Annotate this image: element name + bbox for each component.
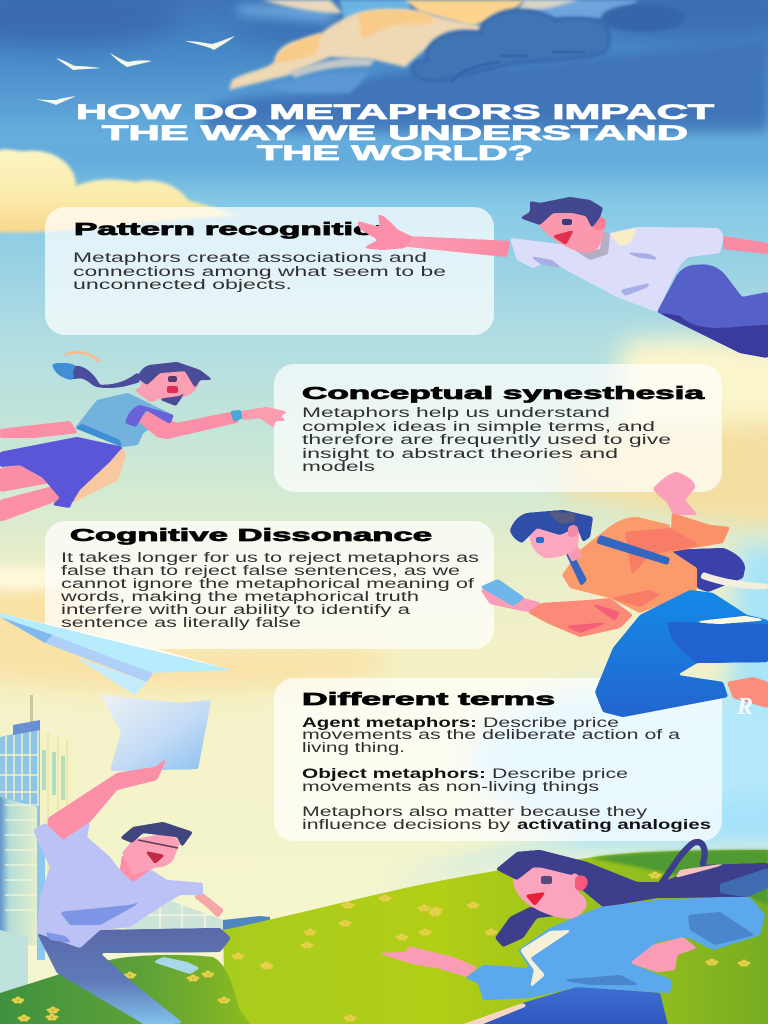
- raised arm: [47, 758, 167, 840]
- backpack strap: [700, 572, 768, 589]
- t-shirt: [510, 227, 723, 312]
- hair: [510, 510, 593, 543]
- shirt shadow folds: [530, 252, 660, 296]
- right arm: [194, 891, 224, 918]
- ponytail: [52, 365, 140, 388]
- large blue cloud mass: [205, 40, 768, 135]
- shoulder strap: [566, 535, 670, 586]
- dark blob top right: [601, 4, 685, 32]
- left yellow cloud: [0, 149, 240, 233]
- reaching arm: [137, 410, 240, 439]
- middle block: [0, 797, 37, 945]
- character: man with glasses and paper: [33, 695, 231, 1024]
- character: flying boy top right: [357, 197, 768, 358]
- forearm: [527, 598, 633, 637]
- plane bright wing: [0, 613, 232, 673]
- panel: different terms: [274, 678, 722, 841]
- bird 2: [110, 53, 152, 67]
- skirt lining: [72, 447, 126, 503]
- title: THE WORLD?: [257, 142, 533, 165]
- paper sheet: [100, 695, 211, 771]
- hand: [241, 407, 288, 428]
- shirt cream highlight: [520, 930, 572, 988]
- shirt: [465, 897, 765, 1000]
- front leg: [0, 485, 65, 522]
- far arm: [723, 236, 768, 254]
- plane top edge: [0, 613, 232, 670]
- body: cognitive dissonance: false than to reject false sentences, as we: [61, 563, 460, 578]
- pants shadow: [668, 622, 768, 663]
- yellow sunlit cloud: [405, 0, 525, 26]
- cream cumulus: [229, 9, 490, 90]
- character: flying girl left: [0, 352, 288, 522]
- hair: [520, 197, 603, 228]
- plane fold: [45, 635, 153, 682]
- hair: [120, 822, 193, 847]
- illustration: paper plane: [0, 613, 232, 695]
- face: [537, 212, 603, 253]
- ponytail ribbon: [65, 352, 100, 362]
- block behind man: [125, 897, 223, 930]
- object metaphors text: Describe price: [492, 766, 628, 781]
- eye: [541, 876, 552, 884]
- pants highlight: [690, 616, 768, 624]
- blue block gap: [37, 830, 45, 960]
- mouth: [552, 230, 574, 245]
- grey cloud shade: [289, 58, 375, 78]
- plane lower wing: [75, 657, 147, 695]
- left dark green hill: [0, 955, 250, 1024]
- middle block lines: [5, 805, 37, 910]
- face: [513, 868, 587, 918]
- bird 1: [185, 36, 235, 50]
- body: conceptual synesthesia: complex ideas in simple terms, and: [302, 419, 655, 434]
- body: conceptual synesthesia: insight to abstract theories and: [302, 446, 618, 461]
- fist: [653, 472, 698, 515]
- long hair: [495, 850, 768, 907]
- ear: [594, 217, 606, 230]
- city buildings: [0, 695, 270, 1000]
- pointing hand and arm: [377, 946, 477, 977]
- hair highlight: [675, 862, 735, 878]
- heading: conceptual synesthesia: Conceptual synesthesia: [302, 383, 705, 403]
- panel: cognitive dissonance: [45, 521, 494, 649]
- mouth: [167, 386, 178, 393]
- body: conceptual synesthesia: [302, 405, 671, 474]
- bright blue sky gap: [340, 0, 410, 25]
- neck: [120, 855, 150, 882]
- closing statement text: influence decisions by: [302, 817, 510, 832]
- sleeve: [125, 405, 174, 427]
- raised sleeve: [670, 513, 730, 552]
- shirt shadow: [45, 900, 145, 943]
- lower right blue sky: [380, 545, 768, 885]
- agent metaphors text: Agent metaphors:: [302, 715, 477, 730]
- eye: [562, 219, 572, 225]
- panel: conceptual synesthesia: [274, 364, 722, 492]
- hand: [480, 589, 542, 612]
- birds: [35, 36, 235, 105]
- body: cognitive dissonance: [59, 550, 479, 630]
- bird 4: [35, 96, 76, 105]
- agent metaphors text: living thing.: [302, 740, 405, 755]
- reaching hand: [357, 214, 413, 250]
- eye: [536, 537, 544, 543]
- character: woman with long hair: [377, 842, 768, 1024]
- title: [76, 101, 714, 165]
- torso: [562, 517, 697, 613]
- body: cognitive dissonance: sentence as literally false: [61, 615, 301, 630]
- pants: [595, 590, 768, 717]
- body: pattern recognition: [73, 250, 446, 292]
- bracelet: [230, 410, 243, 422]
- left hair lock: [495, 907, 563, 947]
- body: pattern recognition: Metaphors create associations and: [73, 250, 427, 265]
- ponytail tip: [52, 363, 76, 380]
- pants: [37, 928, 231, 1024]
- body: cognitive dissonance: interfere with our ability to identify a: [61, 602, 411, 617]
- body: pattern recognition: unconnected objects.: [73, 277, 292, 292]
- main green hill: [223, 850, 768, 1024]
- pale blue sky top right: [520, 0, 640, 18]
- tower right window lines: [48, 733, 67, 900]
- skirt: [477, 987, 668, 1024]
- agent metaphors text: [302, 715, 681, 755]
- tower window lines: [0, 730, 38, 806]
- window lines behind man: [130, 897, 223, 930]
- face: [530, 520, 580, 558]
- mouth: [525, 892, 546, 906]
- back leg: [0, 465, 50, 492]
- orange cloud face: [276, 10, 434, 62]
- pants shadow: [657, 312, 768, 358]
- eye: [168, 376, 177, 382]
- panel: pattern recognition: [45, 207, 494, 335]
- heading: cognitive dissonance: Cognitive Dissonance: [70, 525, 433, 545]
- cloud shadow curls: [452, 52, 585, 82]
- shirt shadows: [560, 912, 755, 985]
- cream cloud band lower left: [0, 580, 390, 690]
- back shoe: [153, 957, 200, 974]
- light blue sky gap: [236, 5, 340, 22]
- object metaphors text: [302, 766, 628, 794]
- top cream wisp: [262, 0, 342, 13]
- glasses: [138, 840, 178, 848]
- character: running boy with phone: [480, 472, 768, 720]
- artist signature: R: [736, 694, 753, 720]
- closing statement text: [302, 804, 711, 832]
- dark hill crest: [590, 850, 768, 905]
- phone: [480, 579, 525, 606]
- title: HOW DO METAPHORS IMPACT: [76, 101, 714, 124]
- meadow flowers: [12, 872, 750, 1022]
- roof cap: [40, 720, 63, 737]
- body: conceptual synesthesia: therefore are frequently used to give: [302, 432, 671, 447]
- hair grey highlight: [548, 512, 575, 524]
- tall glass tower right: [40, 728, 74, 920]
- ear: [575, 876, 588, 891]
- heading: different terms: Different terms: [302, 689, 556, 709]
- shirt: [75, 393, 173, 447]
- object metaphors text: Object metaphors:: [302, 766, 486, 781]
- body: cognitive dissonance: It takes longer for us to reject metaphors as: [61, 550, 479, 565]
- skirt: [0, 437, 123, 508]
- far blue rooftop: [223, 916, 270, 930]
- pants: [657, 265, 768, 358]
- neck: [134, 384, 158, 402]
- face: [140, 367, 200, 399]
- body: conceptual synesthesia: models: [302, 459, 375, 474]
- tower antenna: [30, 695, 33, 723]
- dark haze top: [0, 0, 768, 45]
- far arm: [0, 421, 78, 438]
- shirt hem: [75, 424, 122, 447]
- fade under title: [0, 135, 768, 175]
- skirt cream edge: [458, 1003, 527, 1024]
- tower tinted panes: [42, 750, 65, 800]
- neck: [565, 546, 582, 562]
- tall glass tower left: [0, 728, 40, 930]
- closing statement text: Metaphors also matter because they: [302, 804, 647, 819]
- body: conceptual synesthesia: Metaphors help us understand: [302, 405, 610, 420]
- body: cognitive dissonance: cannot ignore the metaphorical meaning of: [61, 576, 474, 591]
- body: pattern recognition: connections among what seem to be: [73, 264, 446, 279]
- right yellow glow: [560, 338, 768, 526]
- shirt: [33, 822, 203, 948]
- reaching arm: [400, 236, 510, 257]
- title: THE WAY WE UNDERSTAND: [102, 122, 688, 145]
- white cloud left: [0, 566, 60, 590]
- object metaphors text: movements as non-living things: [302, 779, 599, 794]
- ear: [568, 525, 578, 537]
- tower roof sign: [13, 720, 40, 735]
- top grey cloud edge: [515, 0, 580, 13]
- closing statement text: activating analogies: [517, 817, 711, 832]
- hair: [137, 362, 213, 388]
- forearm shadow: [565, 603, 620, 633]
- heading: pattern recognition: Pattern recognition: [74, 219, 396, 239]
- backpack: [670, 548, 745, 592]
- shoe: [727, 677, 768, 708]
- blue sky under cream cloud: [270, 72, 370, 93]
- hair side lock: [158, 388, 188, 406]
- low front block: [0, 930, 28, 1000]
- collar: [567, 232, 610, 260]
- face: [122, 832, 180, 875]
- hip hand: [630, 937, 697, 972]
- hair tip: [720, 868, 768, 897]
- bird 3: [56, 58, 101, 70]
- agent metaphors text: movements as the deliberate action of a: [302, 727, 681, 742]
- mouth: [145, 851, 165, 864]
- front hair: [497, 850, 585, 880]
- torso shadow: [610, 528, 700, 607]
- dark blue cumulus cloud: [412, 10, 609, 80]
- body: cognitive dissonance: words, making the metaphorical truth: [59, 589, 419, 604]
- agent metaphors text: Describe price: [483, 715, 619, 730]
- flowing hair loop: [660, 842, 705, 885]
- shoulder yellow highlight: [610, 228, 637, 246]
- plane dark fold: [0, 617, 53, 643]
